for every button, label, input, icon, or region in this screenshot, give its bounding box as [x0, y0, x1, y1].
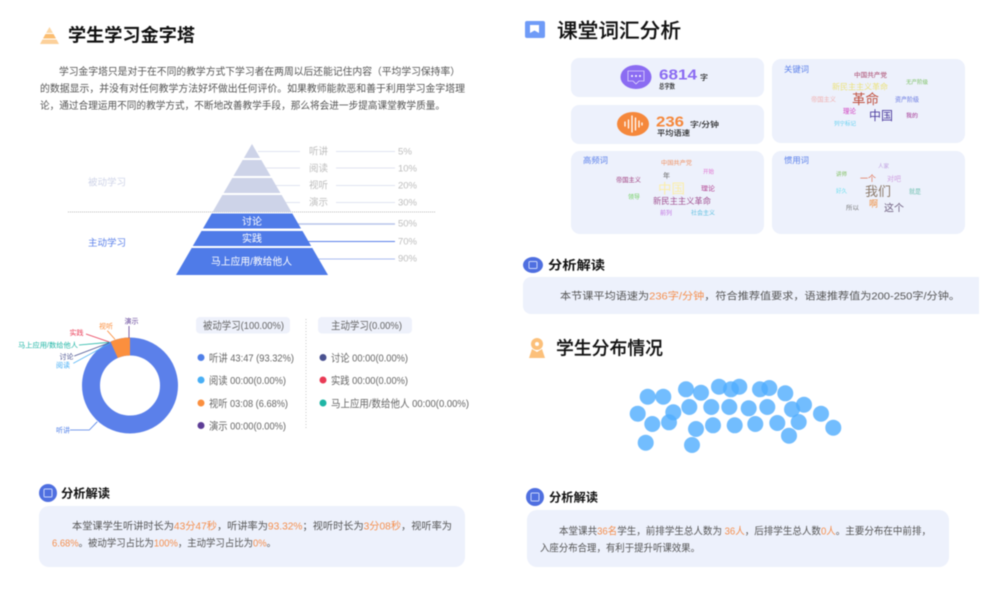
card: high-frequency word cloud: 理论: [701, 184, 716, 192]
card: keyword cloud: 我的: [906, 112, 919, 120]
card: habitual word cloud: 就是: [909, 186, 921, 196]
card: keyword cloud: 列宁标记: [834, 120, 856, 128]
card: habitual word cloud: 人家: [878, 162, 889, 170]
card: keyword cloud: 理论: [843, 106, 856, 116]
legend: passive learning: [196, 317, 294, 432]
card: high-frequency word cloud: 中国: [658, 182, 685, 196]
legend: passive learning: 听讲 43:47 (93.32%): [209, 351, 294, 364]
card: habitual word cloud: 惯用词: [784, 155, 809, 165]
chart: learning pyramid: 实践: [242, 232, 262, 245]
card: total words: 6814: [659, 66, 698, 84]
title: student distribution: 学生分布情况: [556, 338, 663, 358]
chart: learning pyramid: 30%: [398, 198, 418, 208]
chart: learning pyramid: 讨论: [242, 215, 262, 228]
chart: learning pyramid: 视听: [309, 180, 328, 192]
chart: donut of learning modes: 视听: [99, 322, 113, 330]
card: habitual word cloud: 讲师: [836, 170, 847, 178]
card: speech rate: 字/分钟: [690, 119, 720, 129]
icon: student: [529, 338, 545, 358]
heading: analysis, distribution: [526, 488, 598, 506]
chart: learning pyramid: [68, 144, 436, 275]
card: keyword cloud: 革命: [852, 91, 880, 107]
chart: donut of learning modes: 演示: [124, 316, 138, 326]
card: speech rate: 平均语速: [657, 128, 691, 138]
chart: learning pyramid: 被动学习: [88, 176, 126, 188]
card: keyword cloud: 中国共产党: [854, 70, 888, 79]
chart: learning pyramid: 阅读: [309, 162, 328, 174]
heading: analysis, learning: [39, 484, 110, 502]
panel: analysis, distribution: 入座分布合理，有利于提升听课效果。: [540, 542, 700, 554]
legend: passive learning: 演示 00:00(0.00%): [209, 419, 286, 432]
card: total words: [571, 58, 764, 97]
chart: donut of learning modes: 讨论: [60, 352, 74, 361]
title: learning pyramid: 学生学习金字塔: [68, 24, 195, 46]
legend: passive learning: 视听 03:08 (6.68%): [209, 397, 288, 410]
card: keyword cloud: 无产阶级: [906, 78, 928, 86]
card: high-frequency word cloud: 社会主义: [691, 209, 715, 217]
card: high-frequency word cloud: 帝国主义: [616, 175, 641, 184]
chart: learning pyramid: 70%: [398, 236, 418, 248]
panel: analysis, learning: 6.68%。被动学习占比为100%，主动学习占比为0%。: [52, 536, 276, 550]
card: keyword cloud: 新民主主义革命: [832, 82, 888, 92]
card: high-frequency word cloud: 前列: [660, 209, 672, 217]
card: habitual word cloud: 好久: [836, 187, 847, 195]
text block: pyramid introduction: 的数据显示，并没有对任何教学方法好坏做出任何评价。如果教师能款恶和善于利用学习金字塔理: [40, 82, 465, 95]
chart: seating distribution: [630, 379, 841, 453]
text block: pyramid introduction: 论，通过合理运用不同的教学方式，不断地改善教学手段，那么将会进一步提高课堂教学质量。: [40, 99, 445, 112]
text block: pyramid introduction: [40, 65, 465, 112]
chart: learning pyramid: 主动学习: [88, 237, 126, 249]
legend: active learning: 实践 00:00(0.00%): [331, 374, 408, 387]
card: high-frequency word cloud: 开始: [703, 168, 714, 176]
card: total words: 字: [700, 72, 708, 82]
chart: learning pyramid: 马上应用/教给他人: [211, 255, 292, 268]
chart: learning pyramid: 听讲: [309, 146, 328, 158]
card: high-frequency word cloud: 高频词: [583, 155, 608, 165]
card: keyword cloud: 关键词: [784, 64, 809, 74]
card: high-frequency word cloud: 年: [663, 171, 670, 180]
card: keyword cloud: 中国: [869, 108, 893, 123]
heading: analysis, vocabulary: 分析解读: [548, 258, 606, 272]
chart: donut of learning modes: 马上应用/数给他人: [18, 340, 78, 350]
panel: analysis, vocabulary: 本节课平均语速为 236字/分钟 ，符合推荐值要求，语速推荐值为200-250字/分钟。: [560, 290, 960, 302]
card: habitual word cloud: 这个: [884, 202, 904, 214]
chart: learning pyramid: 演示: [309, 196, 328, 208]
legend: active learning: 讨论 00:00(0.00%): [331, 351, 408, 364]
chart: learning pyramid: 5%: [398, 146, 413, 158]
card: habitual word cloud: 对吧: [887, 174, 901, 183]
chart: donut of learning modes: 实践: [70, 328, 84, 337]
legend: passive learning: 阅读 00:00(0.00%): [209, 374, 286, 387]
chart: learning pyramid: 20%: [398, 180, 418, 192]
text block: pyramid introduction: 学习金字塔只是对于在不同的教学方式下学习者在两周以后还能记住内容（平均学习保持率）: [59, 65, 460, 78]
card: keyword cloud: [772, 59, 965, 143]
chart: learning pyramid: 10%: [398, 164, 418, 174]
card: habitual word cloud: 所以: [846, 204, 859, 212]
heading: analysis, learning: 分析解读: [61, 486, 110, 500]
title: classroom vocabulary: 课堂词汇分析: [557, 20, 681, 42]
chart: donut of learning modes: 听讲: [56, 426, 70, 434]
card: keyword cloud: 资产阶级: [895, 94, 919, 104]
card: habitual word cloud: 我们: [865, 184, 891, 199]
legend: active learning: 主动学习(0.00%): [331, 319, 402, 332]
card: total words: 总字数: [659, 82, 675, 90]
chart: learning pyramid: 90%: [398, 254, 418, 264]
chart: donut of learning modes: 阅读: [56, 360, 70, 370]
card: habitual word cloud: [772, 151, 965, 234]
legend: active learning: 马上应用/数给他人 00:00(0.00%): [331, 397, 469, 410]
card: speech rate: [571, 105, 764, 144]
chart: learning pyramid: 50%: [398, 218, 418, 230]
card: high-frequency word cloud: [571, 151, 764, 234]
chart: donut of learning modes: [18, 316, 169, 434]
card: high-frequency word cloud: 新民主主义革命: [653, 196, 712, 206]
legend: active learning: [318, 317, 469, 410]
card: high-frequency word cloud: 中国共产党: [661, 159, 692, 167]
heading: analysis, vocabulary: [523, 257, 606, 273]
card: keyword cloud: 帝国主义: [811, 94, 836, 104]
panel: analysis, distribution: [527, 510, 949, 567]
legend: passive learning: 被动学习(100.00%): [203, 319, 284, 332]
panel: analysis, distribution: 本堂课共36名学生，前排学生总人数为 36人，后排学生总人数0人。主要分布在中前排，: [559, 524, 931, 538]
panel: analysis, learning: [39, 506, 465, 567]
heading: analysis, distribution: 分析解读: [549, 490, 598, 504]
panel: analysis, learning: 本堂课学生听讲时长为43分47秒，听讲率为93.32%；视听时长为3分08秒，视听率为: [72, 520, 452, 532]
card: habitual word cloud: 啊: [869, 199, 878, 209]
card: habitual word cloud: 一个: [860, 174, 876, 184]
panel: analysis, vocabulary: [523, 277, 979, 314]
icon: book: [525, 21, 545, 38]
card: speech rate: 236: [656, 114, 684, 130]
card: high-frequency word cloud: 领导: [628, 193, 640, 201]
icon: pyramid: [40, 27, 59, 44]
